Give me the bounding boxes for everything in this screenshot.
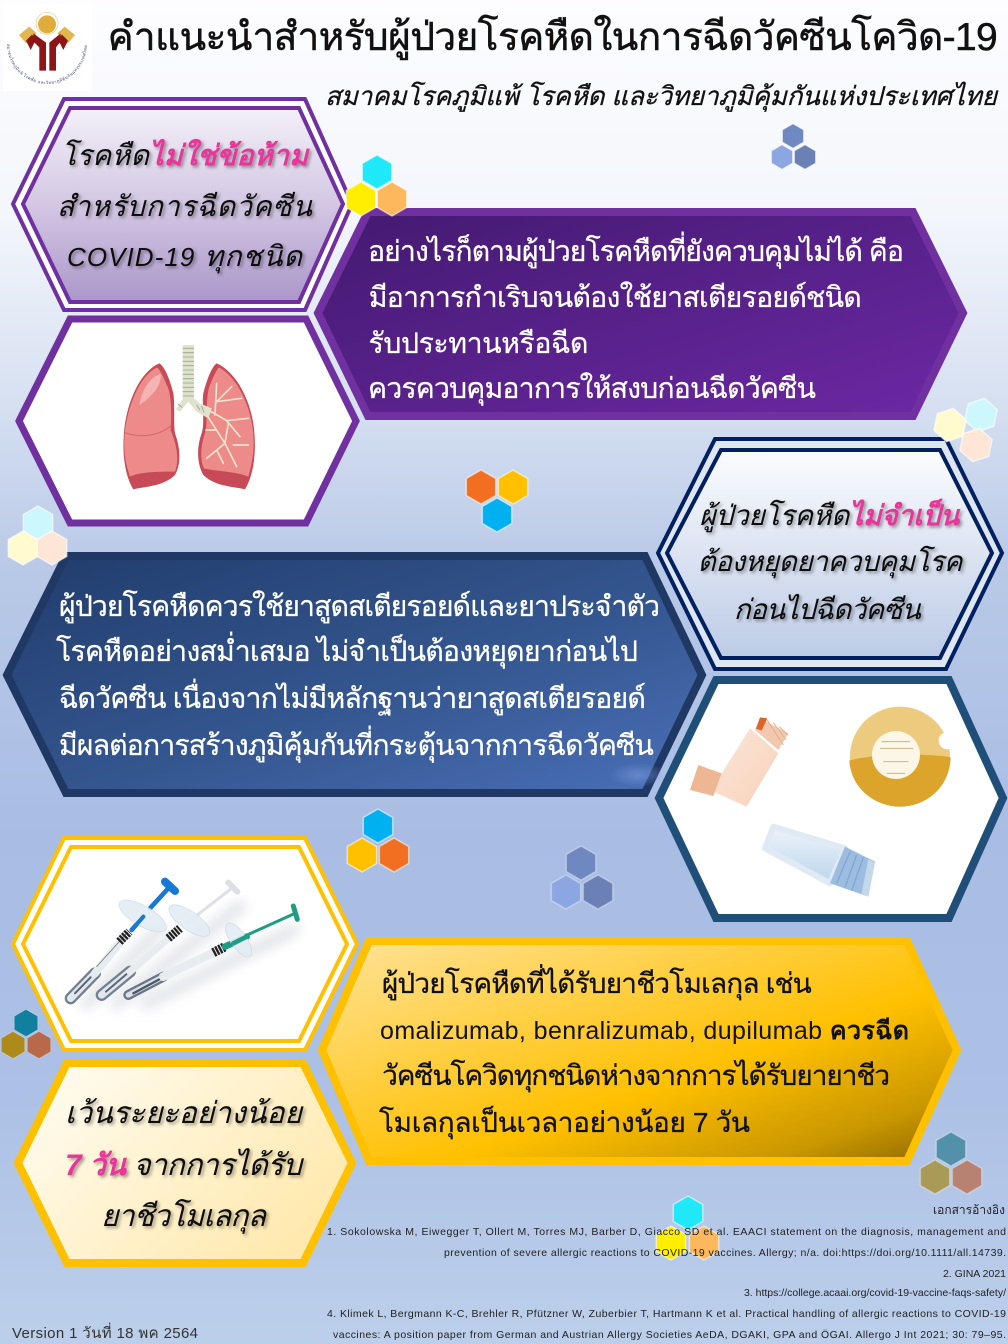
heading text [65,1097,305,1234]
body text: ผู้ป่วยโรคหืดควรใช้ยาสูดสเตียรอยด์และยาประจำตัว [59,590,660,624]
icon: hexagon cluster orange center [466,470,528,532]
heading text: เว้นระยะอย่างน้อย [65,1097,304,1130]
icon: hexagon cluster bright [346,155,407,216]
references: 4. Klimek L, Bergmann K-C, Brehler R, Pfützner W, Zuberbier T, Hartmann K et al. Practical handling of allergic reactions to COVID-19 [327,1308,1006,1320]
heading text: ยาชีวโมเลกุล [101,1198,268,1234]
body text: ฉีดวัคซีน เนื่องจากไม่มีหลักฐานว่ายาสูดสเตียรอยด์ [59,679,646,716]
heading text: สำหรับการฉีดวัคซีน [57,191,314,223]
panel: wait at least 7 days [18,1063,352,1263]
body text: อย่างไรก็ตามผู้ป่วยโรคหืดที่ยังควบคุมไม่ได้ คือ [368,232,904,269]
icon: syringes [71,882,297,1003]
icon: inhalers [690,707,956,897]
references: เอกสารอ้างอิง [933,1203,1005,1217]
references [327,1203,1006,1341]
panel: lung illustration [19,319,356,523]
icon: hexagon cluster bottom left [1,1009,51,1059]
body text: โรคหืดอย่างสม่ำเสมอ ไม่จำเป็นต้องหยุดยาก่อนไป [56,632,638,669]
panel: inhaler illustration [659,680,1003,918]
references: 3. https://college.acaai.org/covid-19-vaccine-faqs-safety/ [744,1287,1006,1299]
panel: no need to stop controller [658,439,1002,669]
icon: hexagon cluster blue top [771,124,816,169]
heading text: ผู้ป่วยโรคหืดไม่จำเป็น [699,498,961,533]
icon: hexagon cluster pale left [8,506,67,565]
icon: hexagon cluster blue center [551,846,613,909]
heading text: COVID-19 ทุกชนิด [67,241,303,274]
body text [379,964,909,1140]
panel: biologics advice [322,941,957,1161]
references: vaccines: A position paper from German and Austrian Allergy Societies AeDA, DGAKI, GPA and ÖGAI. Allergo J Int 2021; 30: 79–95. [333,1329,1006,1341]
body text: มีผลต่อการสร้างภูมิคุ้มกันที่กระตุ้นจากการฉีดวัคซีน [59,726,654,763]
version note: Version 1 วันที่ 18 พค 2564 [12,1322,198,1342]
icon: hexagon cluster references [656,1196,719,1260]
body text: ผู้ป่วยโรคหืดที่ได้รับยาชีวโมเลกุล เช่น [382,964,812,1001]
icon: hexagon cluster pale right [932,395,999,465]
heading text: ต้องหยุดยาควบคุมโรค [697,545,964,579]
heading text: 7 วัน จากการได้รับ [65,1148,305,1182]
body text: โมเลกุลเป็นเวลาอย่างน้อย 7 วัน [379,1105,750,1140]
body text [56,590,660,763]
body text: มีอาการกำเริบจนต้องใช้ยาสเตียรอยด์ชนิด [369,281,862,314]
heading text [57,138,314,274]
heading text: โรคหืดไม่ใช่ข้อห้าม [61,138,310,172]
icon: lungs [123,345,255,489]
body text: ควรควบคุมอาการให้สงบก่อนฉีดวัคซีน [368,372,816,406]
panel: keep using inhaled steroids [7,556,702,793]
title: คำแนะนำสำหรับผู้ป่วยโรคหืดในการฉีดวัคซีนโควิด-19 [108,15,998,60]
body text: รับประทานหรือฉีด [368,328,588,360]
body text: วัคซีนโควิดทุกชนิดห่างจากการได้รับยายาชีว [382,1059,890,1093]
references: 1. Sokolowska M, Eiwegger T, Ollert M, Torres MJ, Barber D, Giacco SD et al. EAACI statement on the diagnosis, management and [327,1226,1006,1238]
icon: hexagon cluster bottom right [920,1132,982,1194]
logo: สมาคมโรคภูมิแพ้ โรคหืด และวิทยาภูมิคุ้มกันแห่งประเทศไทย [7,44,87,84]
heading text: ก่อนไปฉีดวัคซีน [734,593,922,625]
panel: syringe illustration [13,838,357,1050]
body text [368,232,904,406]
logo [7,12,87,84]
heading text [697,498,964,625]
references: prevention of severe allergic reactions to COVID-19 vaccines. Allergy; n/a. doi:https://doi.org/10.1111/all.14739. [444,1247,1006,1259]
references: 2. GINA 2021 [943,1268,1006,1280]
panel: asthma is not a contraindication [13,99,352,310]
icon: hexagon cluster below navy panel [347,809,409,872]
body text: omalizumab, benralizumab, dupilumab ควรฉีด [380,1017,909,1045]
subtitle: สมาคมโรคภูมิแพ้ โรคหืด และวิทยาภูมิคุ้มกันแห่งประเทศไทย [325,81,999,112]
panel: uncontrolled asthma advice [318,212,963,416]
